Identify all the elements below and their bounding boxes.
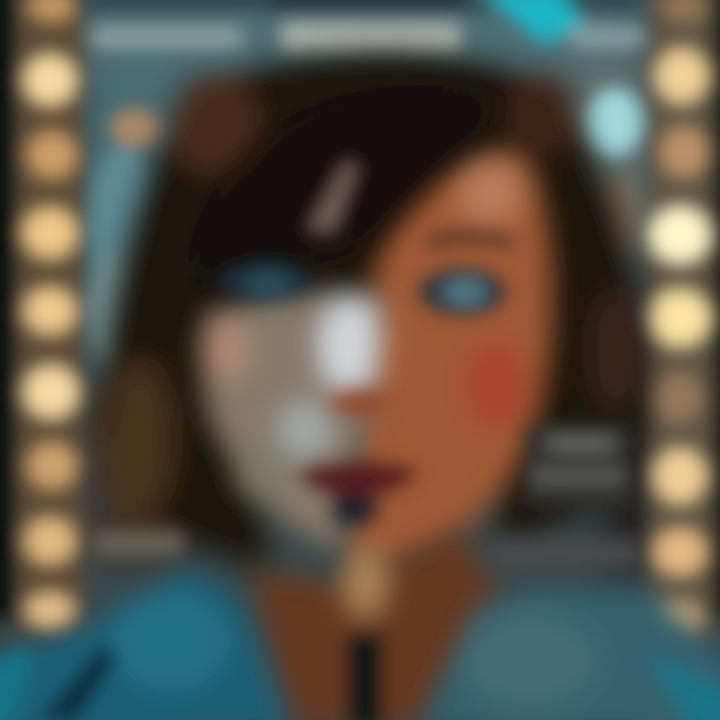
right film strip base bbox=[650, 0, 720, 640]
neck and chest bbox=[250, 530, 500, 720]
left dark edge and strip bbox=[0, 0, 82, 630]
hair: fringe over forehead bbox=[190, 90, 500, 300]
top banner: cyan highlight and blurred heading bars bbox=[80, 0, 644, 365]
lower right caption blocks bbox=[95, 425, 640, 568]
left film-strip lights bbox=[22, 0, 79, 628]
face: warm side bbox=[350, 152, 552, 565]
nose and mouth bbox=[298, 388, 418, 526]
jacket bbox=[0, 570, 720, 720]
fringe highlight and brow bbox=[305, 160, 515, 250]
hair bbox=[100, 52, 645, 570]
right film-strip lights bbox=[649, 0, 711, 636]
eyes bbox=[219, 262, 506, 316]
jacket details: lapel shadow and dark placket bbox=[0, 635, 720, 720]
face: pale side bbox=[201, 293, 385, 550]
